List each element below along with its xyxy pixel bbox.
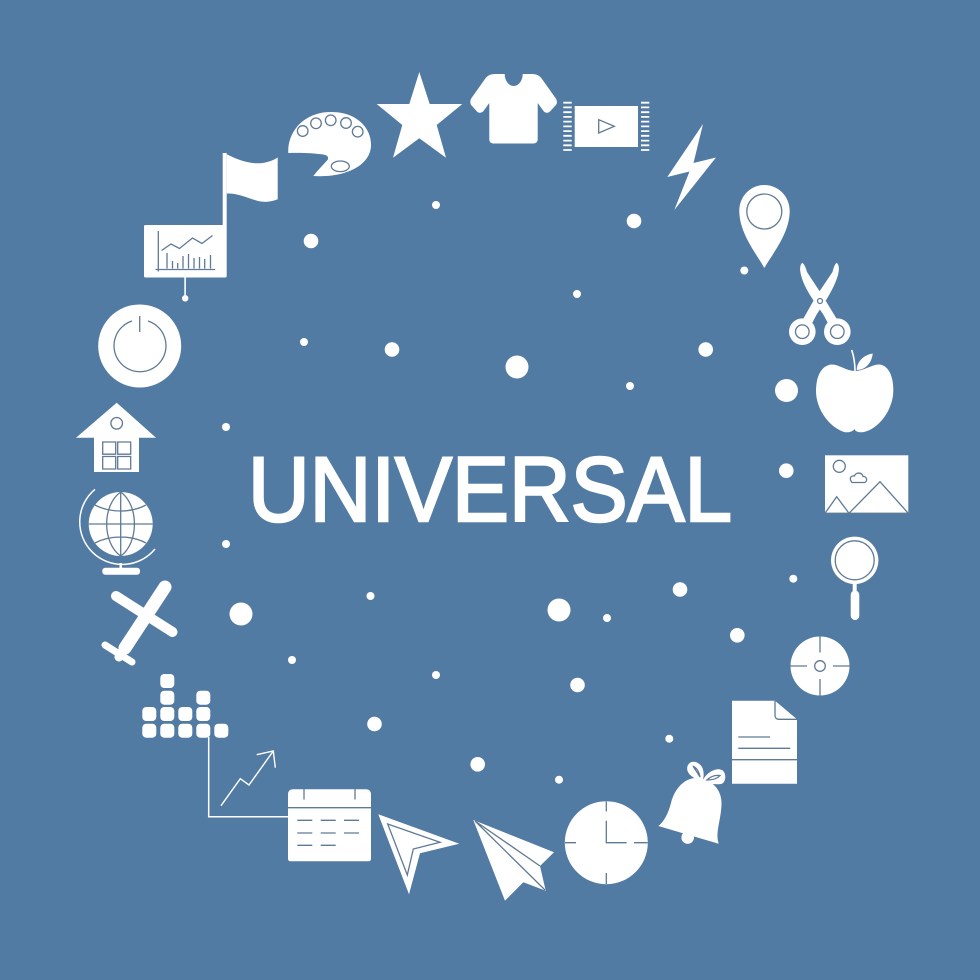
icon: growth arrow	[221, 751, 275, 806]
icon: map pin	[739, 185, 790, 268]
icon: power button	[98, 304, 181, 388]
icon: paper plane	[473, 820, 554, 901]
icon: document	[732, 701, 797, 784]
icon: globe	[80, 489, 155, 575]
icon: cursor arrow	[378, 814, 459, 894]
icon: equalizer blocks	[142, 674, 228, 738]
icon: magnifying glass	[831, 537, 878, 620]
icon: flag	[223, 153, 278, 226]
icon: chart board	[144, 225, 227, 301]
icon: bell	[658, 762, 725, 844]
title: UNIVERSAL	[248, 439, 732, 541]
icon: calendar	[288, 789, 371, 861]
icon: picture	[825, 455, 908, 514]
icon: connector line	[209, 737, 288, 817]
icon: apple	[816, 350, 893, 432]
icon: target	[790, 636, 850, 696]
icon: t-shirt	[470, 74, 557, 144]
icon: video player	[563, 103, 649, 150]
icon: lightning bolt	[667, 124, 716, 210]
icon: scissors	[789, 263, 851, 345]
icon: star	[377, 72, 462, 158]
icon: palette	[288, 112, 371, 176]
icon: airplane	[105, 587, 172, 662]
scattered dots	[222, 201, 798, 784]
icon: house	[76, 403, 156, 472]
icon: clock	[565, 801, 648, 884]
